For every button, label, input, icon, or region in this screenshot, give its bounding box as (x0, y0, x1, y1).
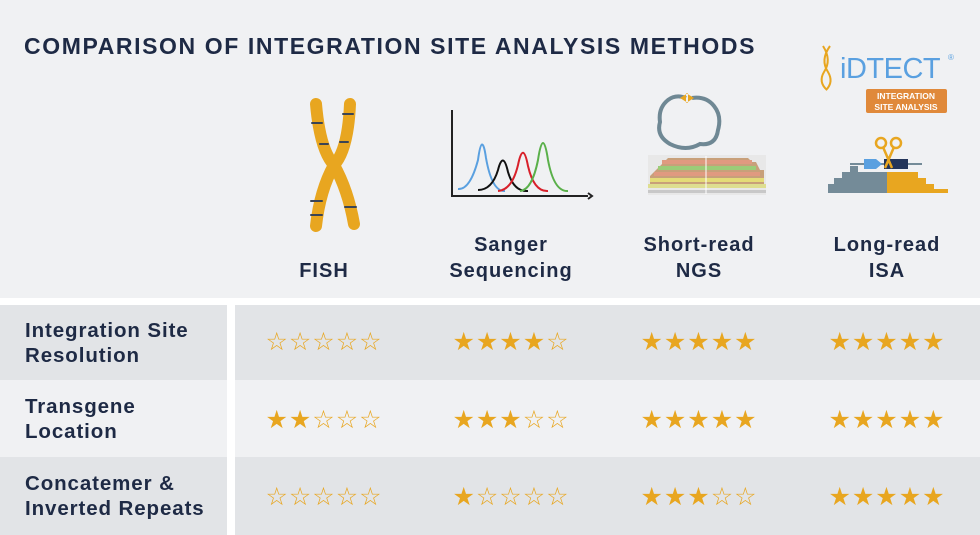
row 1 cells: ★★★★★ (640, 327, 758, 356)
row 1 cells (235, 305, 980, 380)
row 1 cells: ★★★★★ (828, 327, 946, 356)
row label: Integration Site Resolution: Resolution (25, 344, 140, 366)
row 2 cells: ★★★★★ (640, 405, 758, 434)
top header panel (0, 0, 980, 298)
header: Long-read ISA: Long-read (834, 234, 940, 256)
row 3 cells: ★★★★★ (828, 482, 946, 511)
logo: iDTECT: INTEGRATION (877, 91, 935, 101)
header: Sanger Sequencing: Sequencing (449, 260, 573, 282)
header: Short-read NGS (643, 234, 755, 282)
row label: Integration Site Resolution: Integration Site (25, 318, 189, 342)
logo: iDTECT (822, 46, 954, 113)
row label: Transgene Location: Transgene (25, 394, 136, 418)
logo: iDTECT: iDTECT (840, 53, 941, 85)
row label: Integration Site Resolution (0, 305, 227, 380)
icon: chromosome (311, 104, 356, 226)
row label: Transgene Location (0, 380, 227, 457)
stars row 3: ☆☆☆☆☆ (265, 482, 383, 511)
header: Short-read NGS: NGS (676, 260, 722, 282)
row 2 cells: ★★★☆☆ (452, 405, 570, 434)
row 1 cells: ★★★★☆ (452, 327, 570, 356)
row label: Concatemer & Inverted Repeats: Concatemer & (25, 472, 175, 495)
header: Short-read NGS: Short-read (643, 234, 755, 256)
row 3 cells: ★☆☆☆☆ (452, 482, 570, 511)
row 2 cells: ★★★★★ (828, 405, 946, 434)
title: COMPARISON OF INTEGRATION SITE ANALYSIS METHODS (24, 33, 756, 59)
header: Long-read ISA: ISA (869, 260, 905, 282)
row label: Concatemer & Inverted Repeats: Inverted Repeats (25, 497, 205, 520)
logo: iDTECT: ® (948, 53, 954, 62)
header: FISH: FISH (299, 260, 349, 282)
header: Long-read ISA (834, 234, 940, 282)
logo: iDTECT: SITE ANALYSIS (874, 102, 938, 112)
row 3 cells: ★★★☆☆ (640, 482, 758, 511)
stars row 2: ★★☆☆☆ (265, 405, 383, 434)
row 2 cells (235, 380, 980, 457)
icon: sanger chromatogram (452, 110, 592, 199)
stars row 1: ☆☆☆☆☆ (265, 327, 383, 356)
header: Sanger Sequencing: Sanger (474, 234, 548, 256)
header: Sanger Sequencing (449, 234, 573, 282)
row label: Transgene Location: Location (25, 420, 118, 442)
row 3 cells (235, 457, 980, 535)
row label: Concatemer & Inverted Repeats (0, 457, 227, 535)
icons (310, 45, 954, 232)
icon: short-read NGS (648, 93, 766, 195)
icon: long-read ISA (828, 138, 948, 193)
